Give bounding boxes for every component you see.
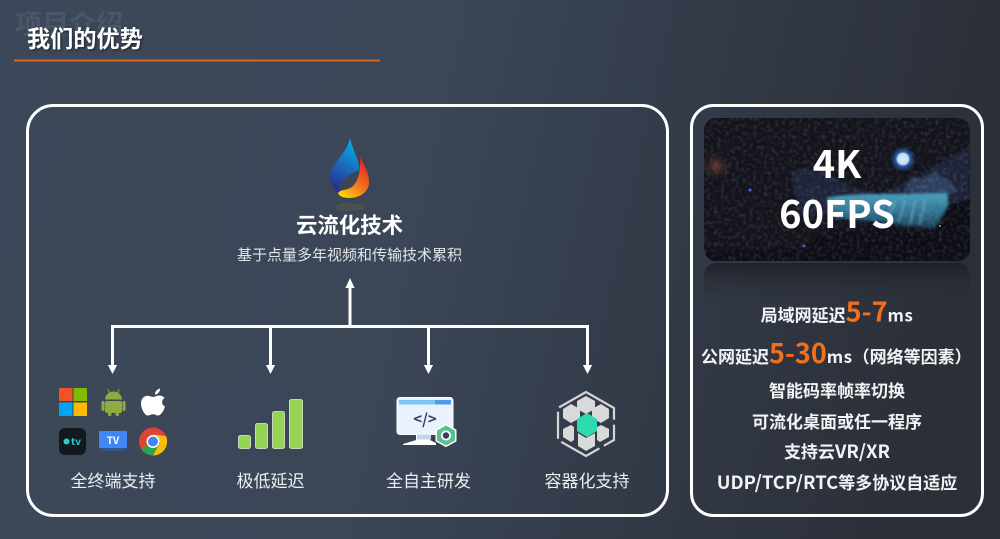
feature: LAN latency: 局域网延迟5-7ms xyxy=(761,290,913,330)
label: 全终端支持: 全终端支持 xyxy=(70,467,156,492)
title underline xyxy=(14,60,380,62)
image reflection xyxy=(704,263,970,309)
icons: platform logos xyxy=(59,388,167,456)
feature: cloud VR: 支持云VR/XR xyxy=(784,438,891,464)
label: 极低延迟: 极低延迟 xyxy=(236,467,304,492)
feature: stream any program: 可流化桌面或任一程序 xyxy=(752,408,922,433)
icon: flame logo xyxy=(330,138,369,211)
heading: 4K 60FPS xyxy=(779,134,895,239)
feature: public network latency: 公网延迟5-30ms（网络等因素） xyxy=(701,332,972,371)
subheading: 基于点量多年视频和传输技术累积 xyxy=(237,244,462,265)
heading: 云流化技术: 云流化技术 xyxy=(296,209,403,240)
icon: apple tv: tv xyxy=(71,433,81,448)
arrow: tree connector xyxy=(108,278,592,374)
icon: monitor with gear: </> xyxy=(413,408,437,430)
image: night landscape xyxy=(701,118,975,265)
title: 我们的优势 xyxy=(27,20,143,54)
icon: tv: TV xyxy=(107,432,120,447)
icon: monitor with gear xyxy=(397,398,455,446)
icon: android xyxy=(102,389,126,416)
label: 容器化支持: 容器化支持 xyxy=(544,467,630,492)
panel: performance features xyxy=(692,106,982,516)
feature: adaptive bitrate: 智能码率帧率切换 xyxy=(769,377,905,402)
icon: container hexagon xyxy=(558,392,614,456)
feature: protocols: UDP/TCP/RTC等多协议自适应 xyxy=(717,469,957,495)
panel: cloud streaming technology xyxy=(28,106,668,516)
icon: windows xyxy=(59,388,87,416)
heading: 4K 60FPS: 60FPS xyxy=(779,184,895,239)
ghost heading: 项目介绍 xyxy=(15,3,123,42)
icon: apple xyxy=(141,388,165,416)
icon: chrome xyxy=(139,428,167,456)
icon: signal bars xyxy=(238,400,302,448)
heading: 4K 60FPS: 4K xyxy=(813,134,862,189)
label: 全自主研发: 全自主研发 xyxy=(386,467,471,492)
